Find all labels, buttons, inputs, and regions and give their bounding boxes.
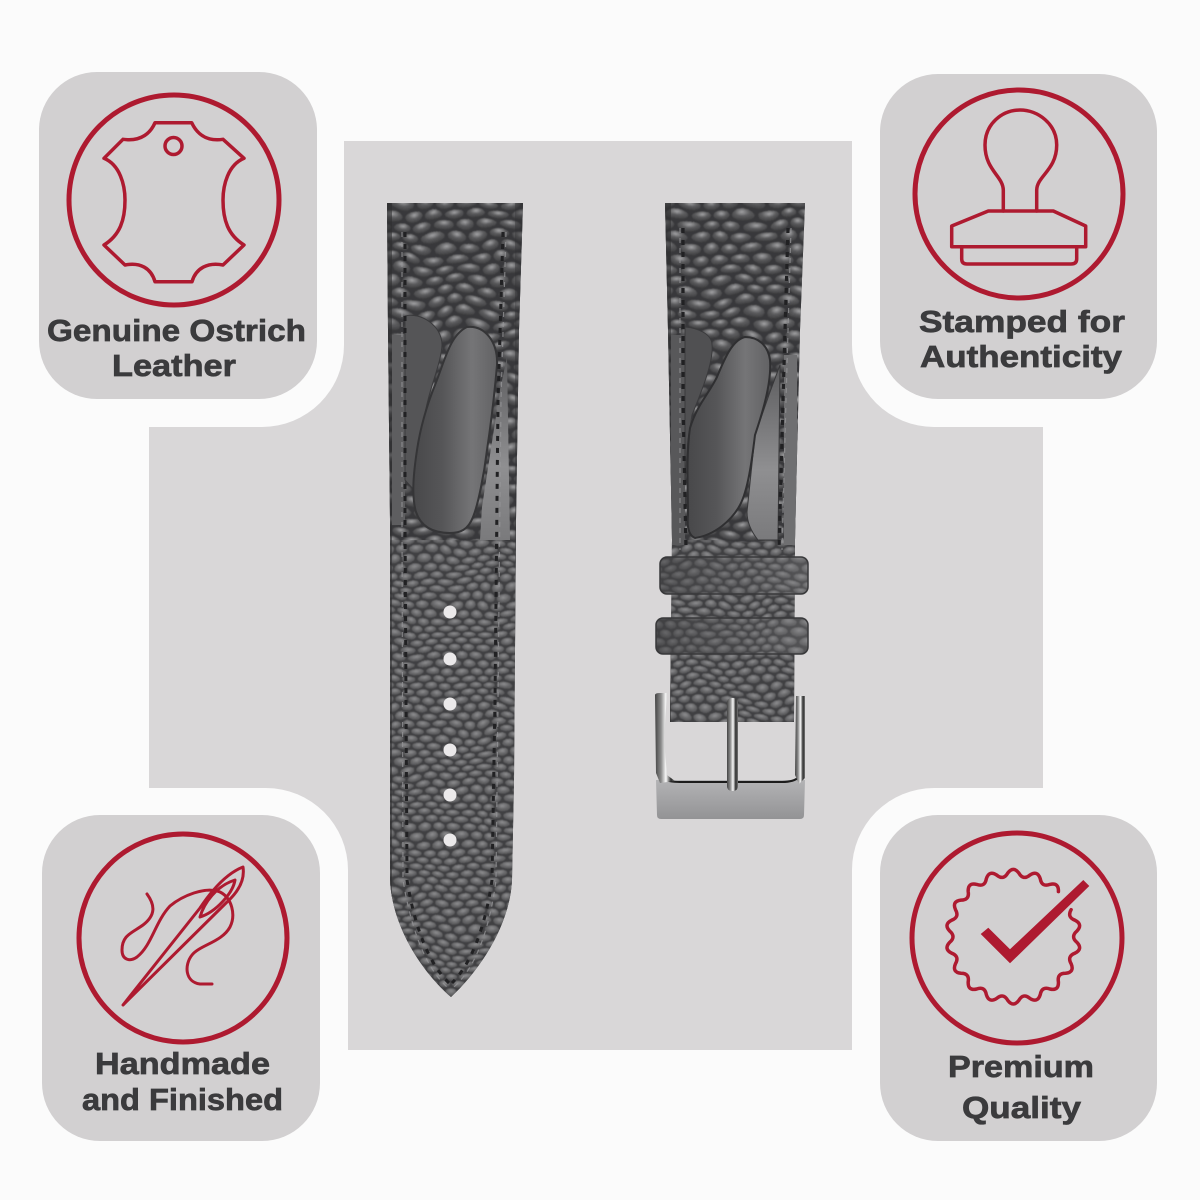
large smooth scale: [688, 337, 770, 538]
heading: handmade and finished: and Finished: [82, 1082, 283, 1117]
strap holes: [444, 606, 456, 846]
watch strap: long piece: [387, 203, 523, 997]
heading: stamped for authenticity: Authenticity: [920, 339, 1123, 374]
central backdrop panel: [149, 141, 1043, 1050]
panel: handmade and finished: [42, 815, 320, 1141]
stitching: [683, 228, 788, 550]
heading: premium quality: Quality: [962, 1090, 1082, 1125]
panel: premium quality: [880, 815, 1157, 1141]
panel: genuine ostrich leather: [39, 72, 317, 399]
heading: stamped for authenticity: Stamped for: [919, 304, 1125, 339]
small scale: [685, 327, 712, 480]
watch strap: buckle piece: [655, 203, 809, 819]
heading: premium quality: Premium: [948, 1049, 1094, 1084]
heading: stamped for authenticity: [919, 304, 1125, 374]
second scale: [405, 315, 442, 490]
light sliver: [480, 357, 510, 540]
large smooth scale: [413, 327, 497, 533]
heading: handmade and finished: Handmade: [95, 1046, 270, 1081]
icon: quality check badge: [912, 833, 1122, 1043]
icon: leather hide: [69, 95, 279, 305]
heading: genuine ostrich leather: Genuine Ostrich: [47, 313, 306, 348]
heading: genuine ostrich leather: Leather: [112, 348, 236, 383]
icon: needle and thread: [79, 834, 287, 1042]
keeper loops: [655, 556, 809, 655]
heading: handmade and finished: [82, 1046, 283, 1117]
buckle: [655, 693, 805, 819]
heading: genuine ostrich leather: [47, 313, 306, 383]
panel: stamped for authenticity: [880, 74, 1157, 399]
heading: premium quality: [948, 1049, 1094, 1125]
light sliver: [747, 365, 780, 540]
stitching: [405, 232, 503, 983]
icon: stamp: [915, 90, 1123, 298]
